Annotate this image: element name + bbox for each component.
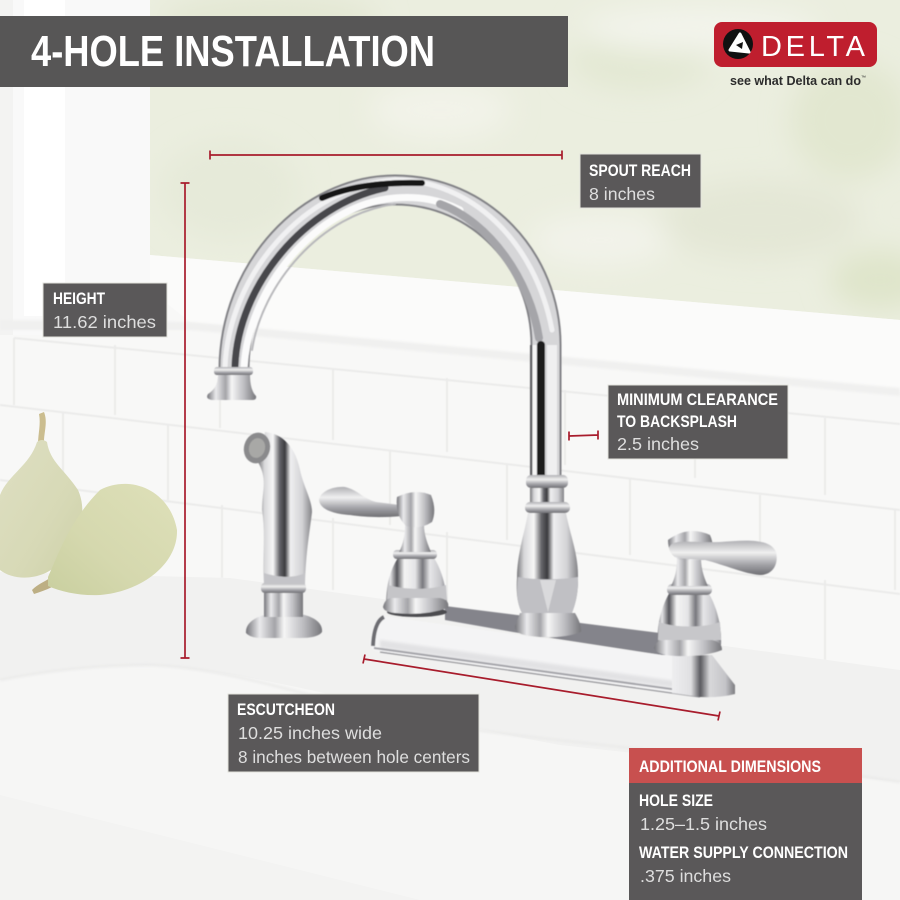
panel header (629, 748, 862, 783)
water supply connection: .375 inches (640, 866, 731, 886)
callout: minimum clearance: 2.5 inches (617, 434, 699, 454)
pears (0, 412, 177, 595)
Delta logo: DELTA (761, 31, 866, 63)
callout: escutcheon: 10.25 inches wide (238, 723, 382, 743)
hole size: HOLE SIZE (639, 791, 713, 810)
Delta logo: see what Delta can do (730, 74, 861, 88)
callout: height: 11.62 inches (53, 312, 156, 332)
right handle (654, 531, 777, 656)
callout: minimum clearance: TO BACKSPLASH (617, 412, 737, 431)
dimension line: height (180, 183, 190, 658)
title banner: 4-HOLE INSTALLATION (31, 27, 435, 76)
spout tip (207, 367, 256, 400)
escutcheon deck (370, 606, 735, 697)
hole size: 1.25–1.5 inches (640, 814, 767, 834)
central body (515, 475, 581, 637)
callout: spout reach: 8 inches (589, 184, 655, 204)
dimension line: escutcheon (363, 654, 720, 720)
callout: spout reach: SPOUT REACH (589, 161, 691, 180)
water supply connection: WATER SUPPLY CONNECTION (639, 843, 848, 862)
countertop (0, 572, 900, 900)
sink basin (0, 665, 900, 900)
callout: spout reach (580, 154, 701, 208)
callout: escutcheon: ESCUTCHEON (237, 700, 335, 719)
left handle (319, 487, 448, 617)
water supply connection (639, 843, 848, 886)
Delta logo: ™ (861, 75, 866, 81)
title banner (0, 16, 568, 87)
backsplash tiles (0, 338, 900, 660)
dimension line: backsplash clearance (569, 430, 598, 440)
panel header: ADDITIONAL DIMENSIONS (639, 757, 821, 776)
callout: escutcheon (228, 694, 479, 772)
spout tube (225, 180, 552, 482)
callout: height (43, 283, 167, 337)
panel: additional dimensions (629, 748, 862, 900)
Delta logo (714, 22, 877, 88)
callout: minimum clearance: MINIMUM CLEARANCE (617, 390, 778, 409)
sprayer (240, 430, 322, 638)
callout: minimum clearance (608, 385, 788, 459)
faucet (207, 180, 777, 697)
callout: height: HEIGHT (53, 289, 105, 308)
window view (150, 0, 900, 325)
hole size (639, 791, 767, 834)
window frame (0, 0, 900, 396)
callout: escutcheon: 8 inches between hole centers (238, 747, 470, 767)
dimension line: spout reach (210, 150, 562, 160)
